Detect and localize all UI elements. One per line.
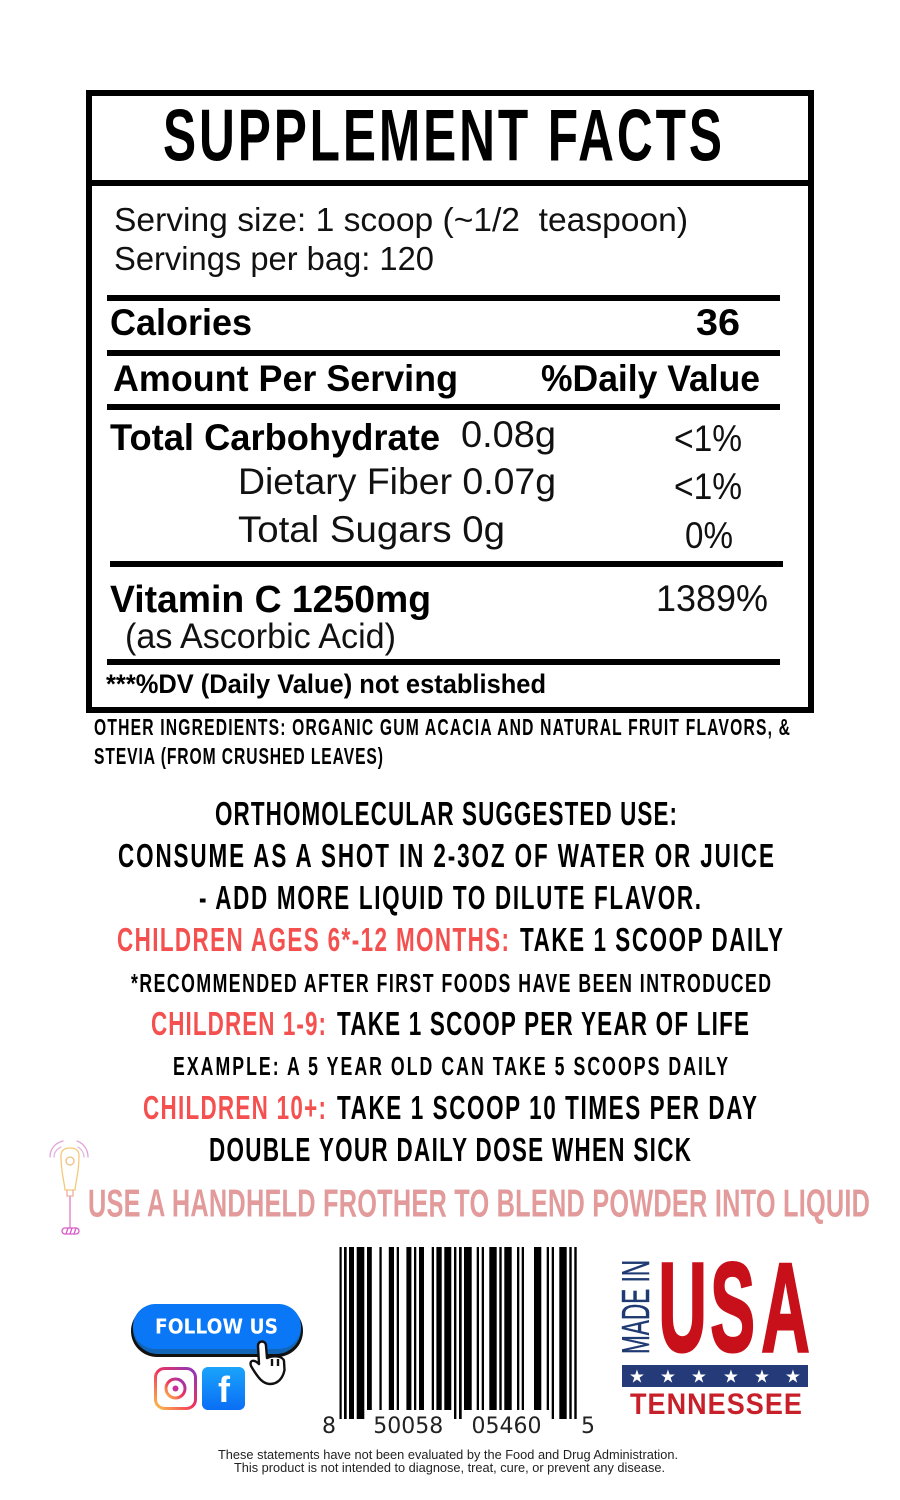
usa letters: USA [658,1239,810,1378]
suggested use instructions [117,795,783,1168]
barcode digits: 05460 [472,1414,542,1439]
total sugars row: Total Sugars 0g [238,509,505,550]
suggested use instructions: - ADD MORE LIQUID TO DILUTE FLAVOR. [199,879,701,916]
amount per serving header: Amount Per Serving [113,358,458,399]
star band: ★ [754,1366,770,1388]
daily value footnote: ***%DV (Daily Value) not established [106,669,546,699]
serving information [114,201,688,277]
other ingredients: STEVIA (FROM CRUSHED LEAVES) [94,744,383,770]
suggested use instructions: CHILDREN 1-9: [151,1005,326,1042]
icon: pointing hand [251,1342,284,1384]
dietary fiber row: <1% [674,466,742,507]
icon: facebook: f [218,1369,231,1410]
follow us button: FOLLOW US [155,1314,278,1338]
barcode digits: 8 [322,1414,336,1439]
star band: ★ [723,1366,739,1388]
amount per serving header: %Daily Value [541,358,760,399]
star band: ★ [785,1366,801,1388]
suggested use instructions: TAKE 1 SCOOP PER YEAR OF LIFE [337,1005,749,1042]
amount per serving header [113,358,760,399]
barcode [322,1247,595,1439]
total sugars row [238,509,733,556]
suggested use instructions: CHILDREN AGES 6*-12 MONTHS: [117,921,509,958]
calories row: 36 [696,302,740,343]
icon: handheld frother [50,1141,88,1234]
serving information: Serving size: 1 scoop (~1/2 teaspoon) [114,201,688,238]
star band: ★ [660,1366,676,1388]
other ingredients [94,715,790,770]
serving information: Servings per bag: 120 [114,240,434,277]
total carbohydrate row [110,414,742,459]
follow us button [131,1304,303,1357]
made in: MADE IN [615,1260,658,1354]
made in usa tennessee logo [615,1239,810,1421]
suggested use instructions: TAKE 1 SCOOP 10 TIMES PER DAY [337,1089,757,1126]
barcode digits: 5 [581,1414,595,1439]
calories row: Calories [110,302,252,343]
vitamin c row: Vitamin C 1250mg [110,579,431,621]
calories row [110,302,740,343]
vitamin c row: 1389% [656,578,768,619]
icon: facebook [202,1367,245,1410]
suggested use instructions: DOUBLE YOUR DAILY DOSE WHEN SICK [209,1131,691,1168]
fda disclaimer [218,1448,678,1475]
total carbohydrate row: Total Carbohydrate [110,417,440,458]
dietary fiber row [238,461,742,507]
fda disclaimer: These statements have not been evaluated by the Food and Drug Administration. [218,1448,678,1462]
suggested use instructions: EXAMPLE: A 5 YEAR OLD CAN TAKE 5 SCOOPS DAILY [173,1052,728,1081]
suggested use instructions: CHILDREN 10+: [143,1089,326,1126]
suggested use instructions: CONSUME AS A SHOT IN 2-3OZ OF WATER OR JUICE [118,837,774,874]
suggested use instructions: *RECOMMENDED AFTER FIRST FOODS HAVE BEEN INTRODUCED [131,969,771,998]
panel: supplement facts [89,93,811,710]
total carbohydrate row: <1% [674,418,742,459]
title: SUPPLEMENT FACTS [163,95,722,177]
star band: ★ [691,1366,707,1388]
barcode digits: 50058 [373,1414,443,1439]
tennessee: TENNESSEE [630,1388,802,1421]
suggested use instructions: TAKE 1 SCOOP DAILY [520,921,783,958]
suggested use instructions: ORTHOMOLECULAR SUGGESTED USE: [215,795,677,832]
icon: instagram [156,1368,196,1408]
other ingredients: OTHER INGREDIENTS: ORGANIC GUM ACACIA AND NATURAL FRUIT FLAVORS, & [94,715,790,741]
vitamin c row [110,578,768,656]
total sugars row: 0% [685,515,733,556]
star band [622,1365,808,1388]
vitamin c row: (as Ascorbic Acid) [125,617,396,656]
total carbohydrate row: 0.08g [461,414,556,455]
frother tip: USE A HANDHELD FROTHER TO BLEND POWDER INTO LIQUID [88,1181,870,1225]
barcode digits [322,1414,595,1439]
star band: ★ [629,1366,645,1388]
fda disclaimer: This product is not intended to diagnose, treat, cure, or prevent any disease. [234,1461,665,1475]
dietary fiber row: Dietary Fiber 0.07g [238,461,556,502]
